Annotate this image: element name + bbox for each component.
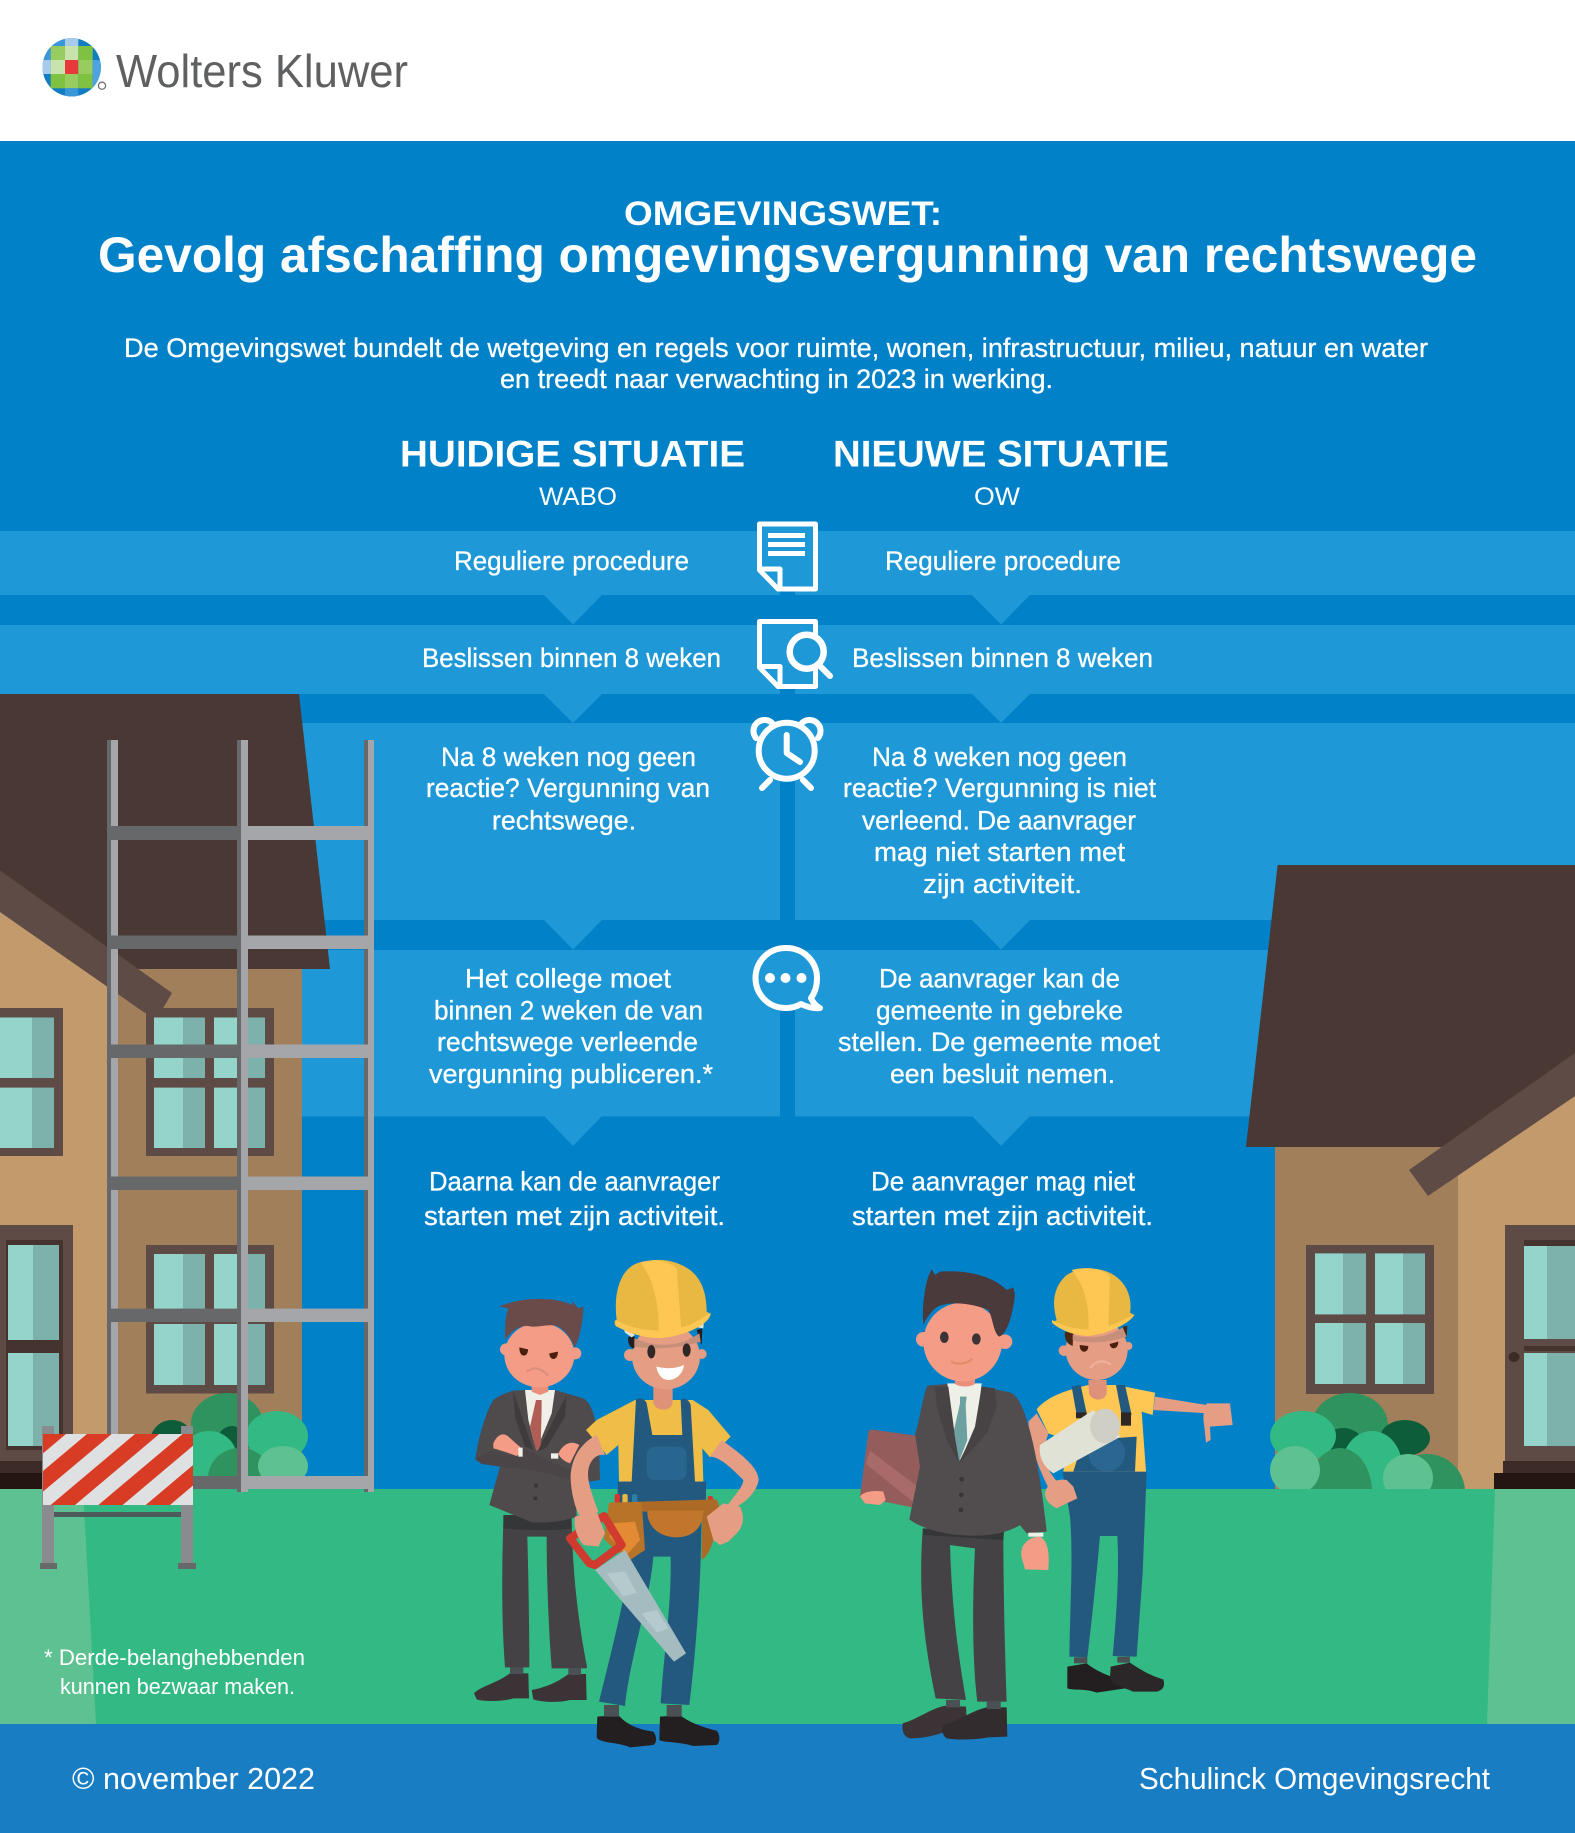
footnote: * Derde-belanghebbenden <box>44 1645 305 1670</box>
column heading: nieuwe situatie: OW <box>974 483 1020 511</box>
text: right band 4: gemeente in gebreke <box>876 996 1123 1026</box>
text: right band 2: Beslissen binnen 8 weken <box>852 643 1153 673</box>
icon: chat bubble <box>756 948 820 1008</box>
text: right band 4: De aanvrager kan de <box>879 964 1120 994</box>
text: left band 1: Reguliere procedure <box>454 546 689 576</box>
left path <box>0 1489 96 1724</box>
upper left window <box>0 1008 63 1156</box>
text: right band 4 <box>838 964 1160 1089</box>
door with glass <box>0 1225 73 1489</box>
column heading: nieuwe situatie <box>833 434 1169 511</box>
column heading: huidige situatie: WABO <box>539 483 617 511</box>
column heading: nieuwe situatie: NIEUWE SITUATIE <box>833 434 1169 474</box>
text: left band 4 <box>429 964 713 1089</box>
text: left band 3: rechtswege. <box>492 806 636 836</box>
text: left band 4: Het college moet <box>465 964 672 994</box>
character: angry businessman <box>474 1299 600 1702</box>
text: right band 3: Na 8 weken nog geen <box>872 742 1127 772</box>
text: left outcome <box>424 1167 725 1231</box>
grass <box>0 1489 1575 1724</box>
text: right band 3 <box>843 742 1156 899</box>
door <box>1494 1225 1575 1489</box>
lower right window <box>146 1245 274 1394</box>
text: right band 4: stellen. De gemeente moet <box>838 1027 1160 1057</box>
column heading: huidige situatie <box>400 434 745 511</box>
intro text <box>124 333 1428 394</box>
footer text: date: © november 2022 <box>72 1761 315 1796</box>
left bushes <box>152 1393 308 1476</box>
text: left band 3: reactie? Vergunning van <box>426 773 710 803</box>
icon: document <box>760 524 816 589</box>
footer bar <box>0 1724 1575 1833</box>
text: right band 3: verleend. De aanvrager <box>862 806 1136 836</box>
character: construction worker thumbs down <box>1012 1268 1233 1693</box>
intro text: De Omgevingswet bundelt de wetgeving en regels voor ruimte, wonen, infrastructuur, milieu, natuur en water <box>124 333 1428 363</box>
footnote: kunnen bezwaar maken. <box>60 1674 295 1699</box>
text: left band 4: vergunning publiceren.* <box>429 1059 713 1089</box>
title block: OMGEVINGSWET: <box>624 195 942 233</box>
text: right band 3: reactie? Vergunning is niet <box>843 773 1156 803</box>
window <box>1306 1245 1434 1394</box>
column heading: huidige situatie: HUIDIGE SITUATIE <box>400 434 745 474</box>
icon: alarm clock <box>753 720 821 788</box>
text: right outcome <box>852 1167 1153 1231</box>
footer text: publisher: Schulinck Omgevingsrecht <box>1139 1761 1490 1796</box>
text: right band 1: Reguliere procedure <box>885 546 1121 576</box>
text: left band 4: binnen 2 weken de van <box>434 996 703 1026</box>
text: right outcome: starten met zijn activiteit. <box>852 1201 1153 1231</box>
text: left outcome: Daarna kan de aanvrager <box>429 1167 720 1197</box>
road barrier <box>40 1426 196 1569</box>
text: left band 3: Na 8 weken nog geen <box>441 742 696 772</box>
footnote <box>44 1645 305 1699</box>
title block <box>98 195 1477 283</box>
scaffolding <box>107 740 374 1492</box>
text: left outcome: starten met zijn activiteit. <box>424 1201 725 1231</box>
text: left band 4: rechtswege verleende <box>437 1027 698 1057</box>
title block: Gevolg afschaffing omgevingsvergunning van rechtswege <box>98 227 1477 283</box>
text: right band 3: zijn activiteit. <box>923 869 1082 899</box>
logo: Wolters Kluwer <box>42 38 408 98</box>
text: right outcome: De aanvrager mag niet <box>871 1167 1135 1197</box>
right house <box>1246 865 1575 1489</box>
intro text: en treedt naar verwachting in 2023 in werking. <box>500 364 1053 394</box>
upper right window <box>146 1008 274 1156</box>
text: left band 3 <box>426 742 710 836</box>
text: right band 3: mag niet starten met <box>874 837 1125 867</box>
flow bands with arrows <box>0 531 1575 1146</box>
right path <box>1487 1489 1575 1724</box>
icon: document with magnifier <box>760 622 830 686</box>
logo: Wolters Kluwer: Wolters Kluwer <box>116 45 408 97</box>
text: left band 2: Beslissen binnen 8 weken <box>422 643 721 673</box>
text: right band 4: een besluit nemen. <box>890 1059 1115 1089</box>
right bushes <box>1270 1393 1465 1489</box>
character: smiling construction worker with saw <box>570 1260 759 1747</box>
left house <box>0 694 330 1489</box>
character: smiling businessman with folder <box>860 1269 1049 1739</box>
